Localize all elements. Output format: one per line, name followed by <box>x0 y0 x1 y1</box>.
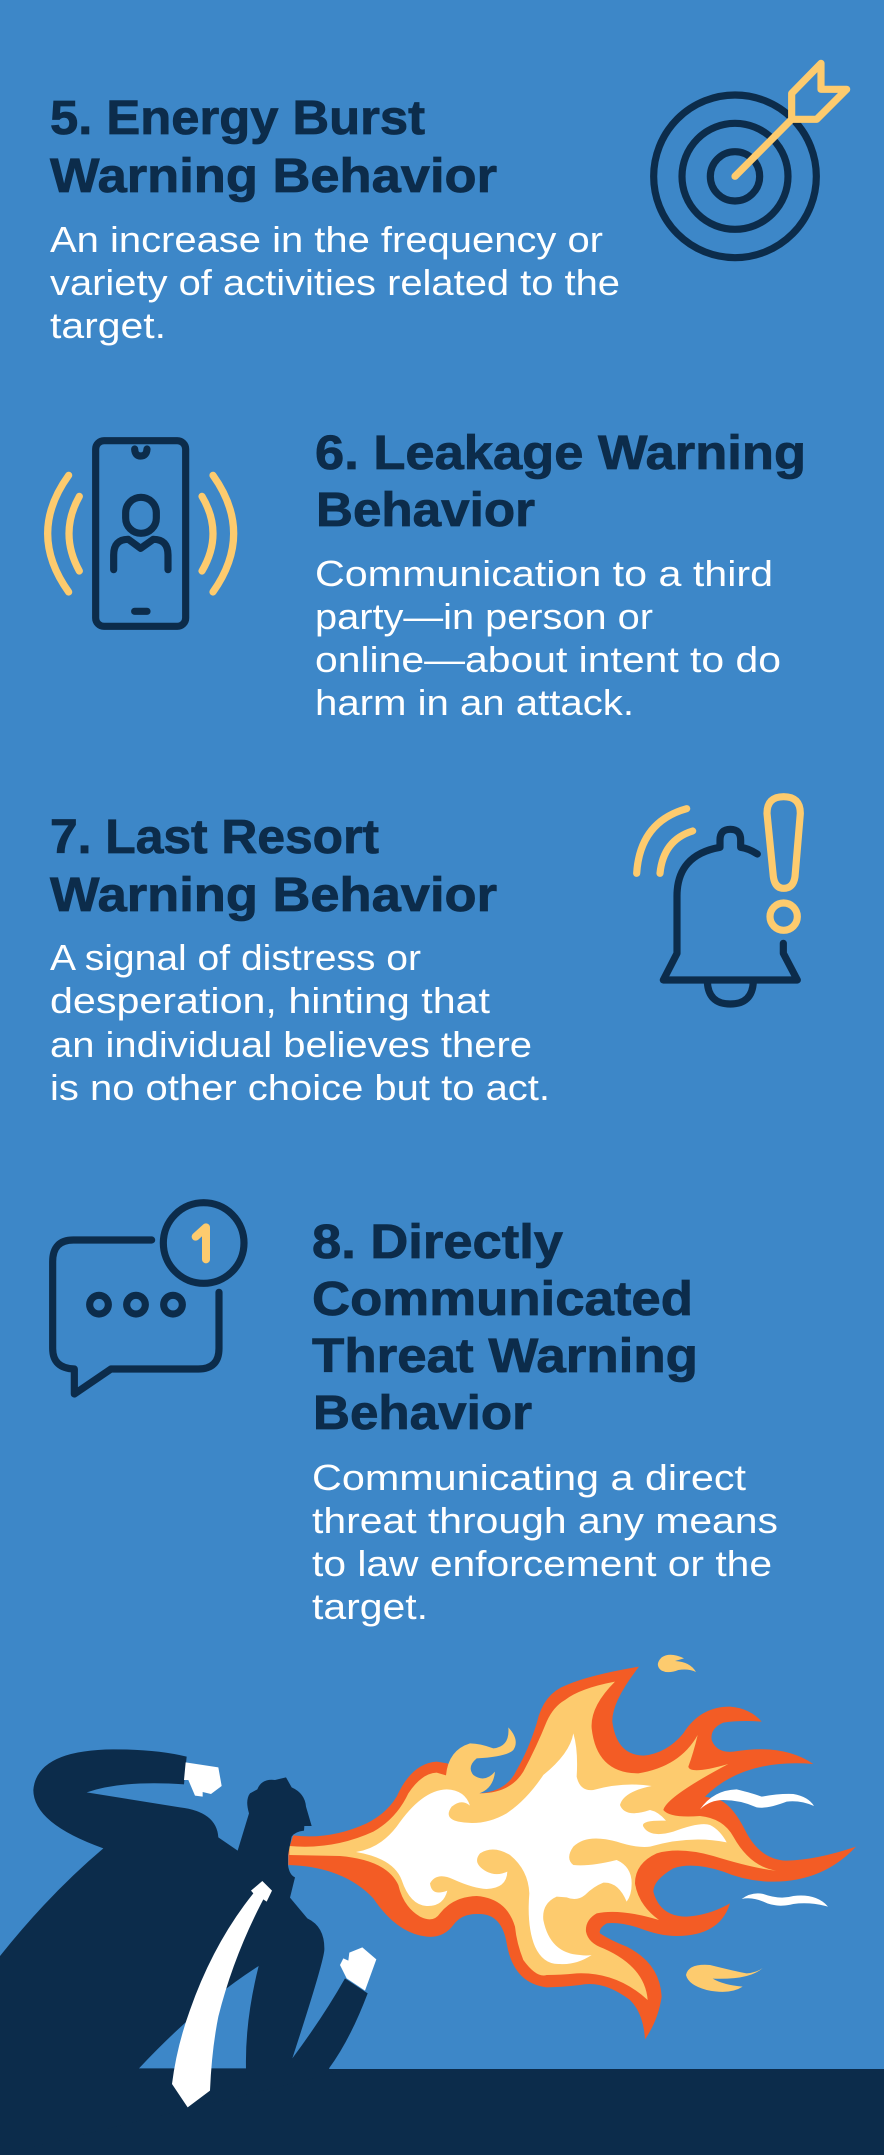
text: Leakage description: harm in an attack. <box>315 682 634 723</box>
text: Last Resort description: is no other choice but to act. <box>50 1067 550 1108</box>
text: Leakage description: Communication to a third <box>315 553 773 594</box>
ground band <box>0 2069 884 2155</box>
heading: Directly Communicated Threat: Behavior <box>313 1387 532 1440</box>
text: Directly Communicated Threat description: Communicating a direct <box>312 1457 746 1498</box>
heading: Energy Burst: 5. Energy Burst <box>50 92 425 145</box>
illustration: man breathing fire <box>0 1655 884 2155</box>
text: Last Resort description: desperation, hinting that <box>50 980 490 1021</box>
heading: Leakage: Behavior <box>316 484 535 537</box>
flame <box>288 1667 856 2039</box>
text: Directly Communicated Threat description: target. <box>312 1586 428 1627</box>
text: Energy Burst description: variety of activities related to the <box>50 262 620 303</box>
panel: 5. Energy Burst <box>50 63 847 346</box>
heading: Leakage <box>315 427 806 537</box>
icon: vibrating phone with person <box>48 441 234 626</box>
text: Energy Burst description: An increase in the frequency or <box>50 219 603 260</box>
heading: Energy Burst <box>50 92 497 203</box>
text: Directly Communicated Threat description <box>312 1457 778 1627</box>
heading: Energy Burst: Warning Behavior <box>50 150 497 203</box>
panel: 7. Last Resort <box>50 797 800 1108</box>
text: Directly Communicated Threat description: threat through any means <box>312 1500 778 1541</box>
heading: Leakage: 6. Leakage Warning <box>315 427 806 480</box>
heading: Last Resort: 7. Last Resort <box>50 811 379 864</box>
text: Directly Communicated Threat description: to law enforcement or the <box>312 1543 772 1584</box>
flame sparks and wisps <box>658 1655 828 1992</box>
text: Leakage description <box>315 553 781 723</box>
text: Leakage description: party—in person or <box>315 596 653 637</box>
text: Last Resort description <box>50 937 550 1108</box>
heading: Directly Communicated Threat <box>312 1216 698 1440</box>
text: Energy Burst description: target. <box>50 305 166 346</box>
heading: Last Resort <box>50 811 497 922</box>
panel: 8. Directly Communicated Threat <box>53 1203 778 1627</box>
man silhouette with tie and cuffs <box>0 1749 376 2155</box>
icon: bell with exclamation mark <box>637 797 800 1004</box>
text: Energy Burst description <box>50 219 620 346</box>
icon: target with arrow <box>654 63 847 258</box>
heading: Directly Communicated Threat: Communicated <box>312 1273 693 1326</box>
heading: Directly Communicated Threat: Threat Warning <box>312 1330 698 1383</box>
text: Leakage description: online—about intent to do <box>315 639 781 680</box>
heading: Last Resort: Warning Behavior <box>50 869 497 922</box>
text: Last Resort description: an individual believes there <box>50 1024 532 1065</box>
icon: chat bubble with notification <box>53 1203 244 1394</box>
panel: 6. Leakage <box>48 427 806 723</box>
heading: Directly Communicated Threat: 8. Directly <box>312 1216 563 1269</box>
text: Last Resort description: A signal of distress or <box>50 937 421 978</box>
